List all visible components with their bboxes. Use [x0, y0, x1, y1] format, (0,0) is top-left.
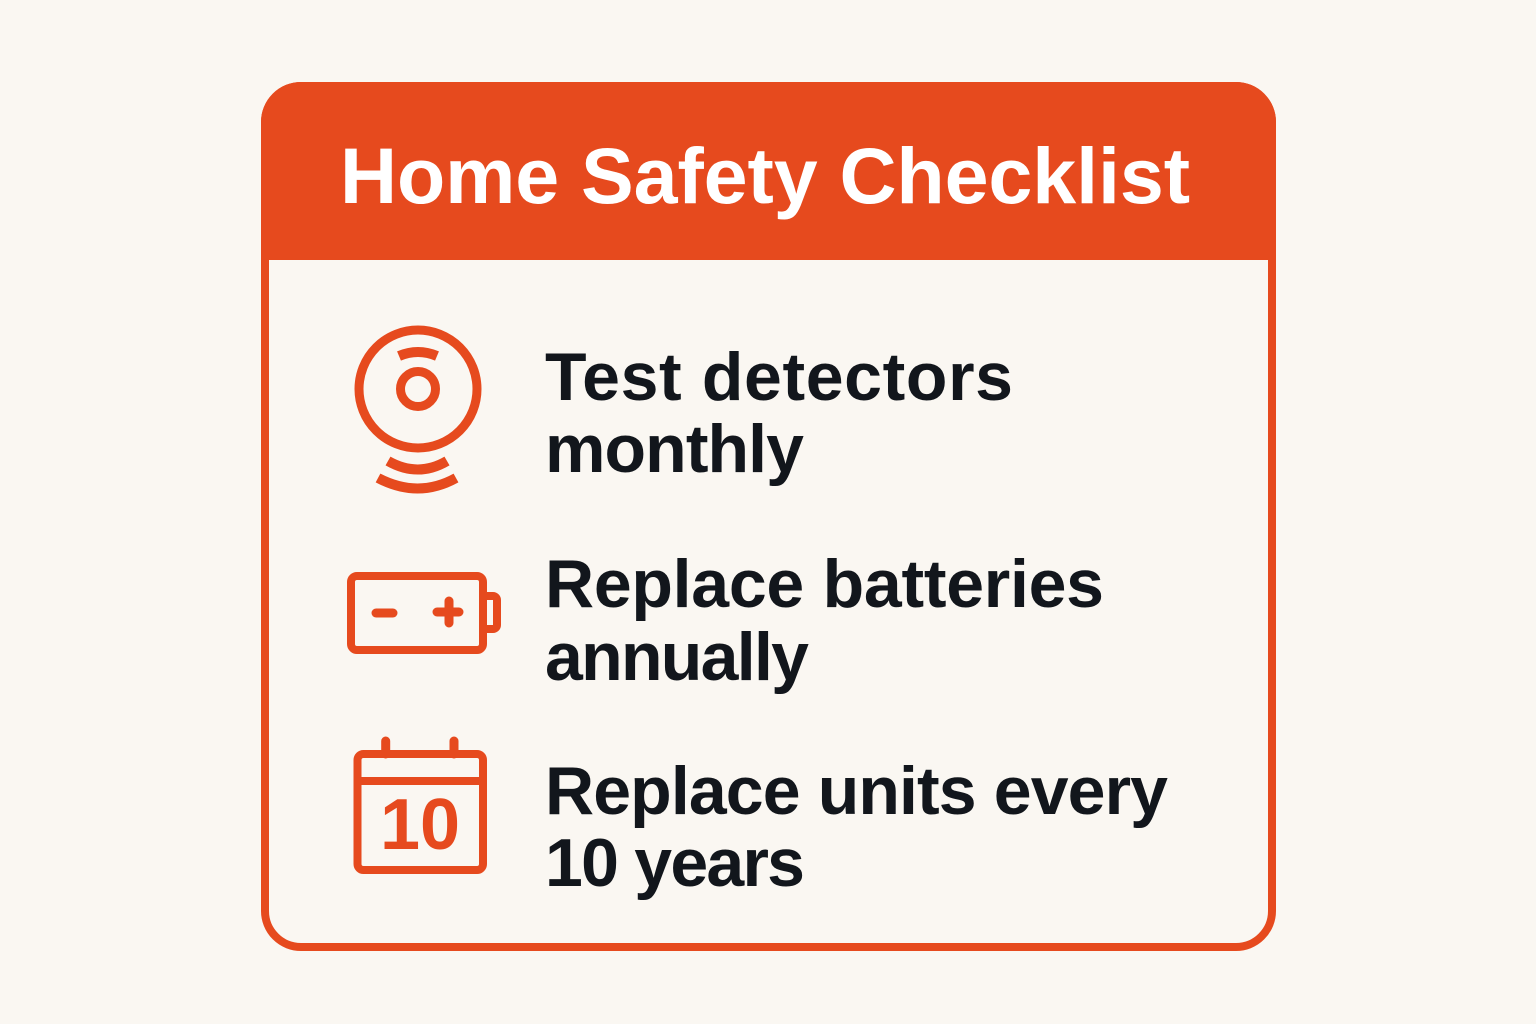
text: replace batteries [545, 546, 1104, 695]
text: test detectors: monthly [545, 411, 804, 487]
title: Home Safety Checklist [340, 131, 1190, 220]
icon: calendar [358, 741, 483, 870]
icon: calendar: 10 [380, 785, 460, 865]
header band [261, 82, 1276, 260]
icon: smoke detector [359, 330, 477, 488]
text: replace units: 10 years [545, 825, 805, 901]
text: replace units: Replace units every [545, 753, 1168, 829]
text: test detectors: Test detectors [545, 339, 1013, 415]
text: replace batteries: Replace batteries [545, 546, 1104, 622]
text: test detectors [545, 339, 1013, 487]
text: replace batteries: annually [545, 619, 809, 695]
panel: checklist card [261, 82, 1276, 947]
text: replace units [545, 753, 1168, 901]
icon: battery [351, 576, 497, 650]
